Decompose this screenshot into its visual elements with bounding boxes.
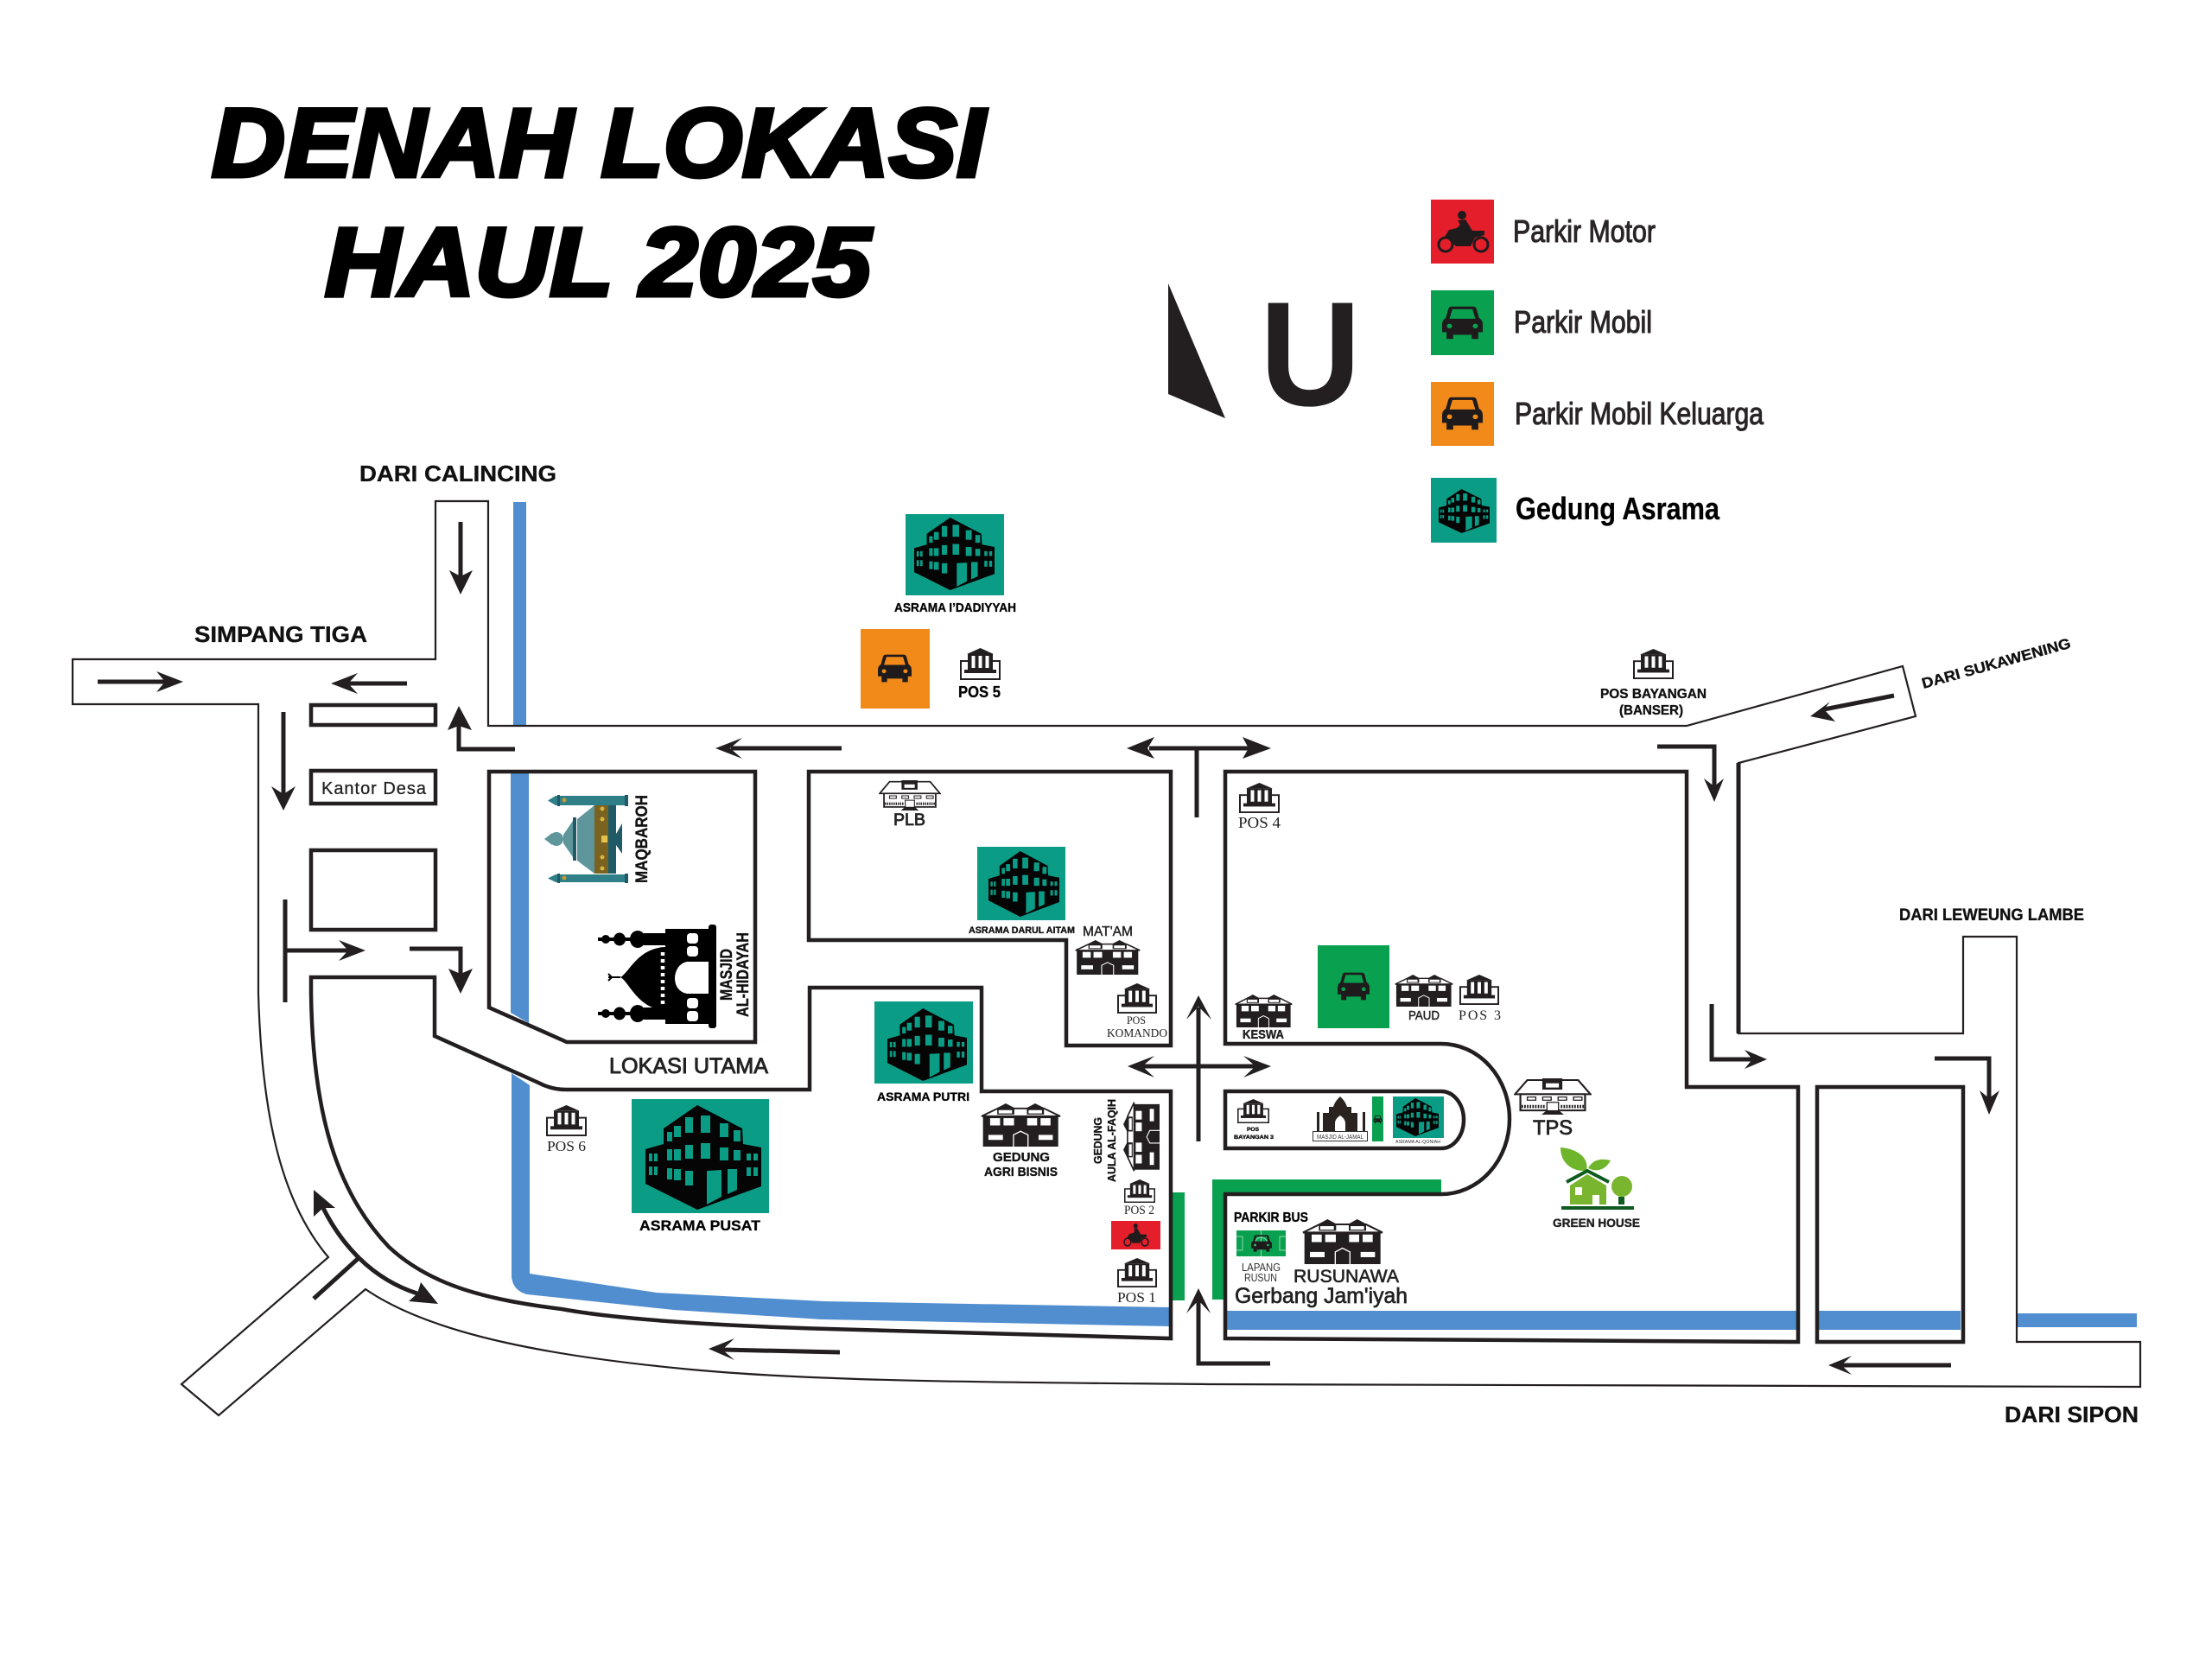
asrama putri xyxy=(874,1001,973,1103)
pos 6: POS 6 xyxy=(547,1138,586,1154)
parkir mobil east xyxy=(1318,945,1389,1028)
icon: masjid al-hidayah xyxy=(598,925,716,1028)
block: small box xyxy=(311,705,435,725)
asrama putri: ASRAMA PUTRI xyxy=(877,1090,969,1103)
label: dari leweung lambe: DARI LEWEUNG LAMBE xyxy=(1899,906,2084,925)
arrow: from calincing xyxy=(449,522,473,594)
arrow: east turn right xyxy=(1712,1004,1767,1069)
title: DENAH LOKASI xyxy=(212,89,988,197)
pos 1: POS 1 xyxy=(1117,1289,1156,1306)
legend: parkir mobil: Parkir Mobil xyxy=(1514,304,1652,340)
pos 4: POS 4 xyxy=(1238,814,1281,831)
arrow: turn down xyxy=(410,949,473,994)
parkir mobil al-jamal xyxy=(1372,1096,1383,1141)
green parking strips xyxy=(1173,1179,1441,1300)
legend: gedung asrama xyxy=(1431,478,1720,543)
rusunawa xyxy=(1294,1219,1399,1287)
north indicator: U xyxy=(1260,271,1361,437)
north indicator xyxy=(1168,271,1361,437)
pos bayangan 3: POS xyxy=(1247,1127,1260,1133)
block: lokasi utama xyxy=(489,772,755,1042)
icon: maqbaroh xyxy=(544,795,628,883)
pos 5: POS 5 xyxy=(958,683,1001,701)
road network xyxy=(73,501,2140,1415)
arrow: cross junction xyxy=(1128,995,1271,1141)
label: dari sipon: DARI SIPON xyxy=(2005,1402,2139,1427)
gedung aula al-faqih: AULA AL-FAQIH xyxy=(1105,1099,1118,1182)
rusunawa: RUSUNAWA xyxy=(1294,1267,1399,1287)
legend: parkir motor xyxy=(1431,200,1656,264)
lapang rusun: RUSUN xyxy=(1244,1271,1277,1284)
paud: PAUD xyxy=(1408,1008,1440,1023)
keswa xyxy=(1236,995,1292,1042)
pos 4 xyxy=(1238,783,1281,831)
block: east campus xyxy=(1225,772,1798,1342)
masjid al-jamal: MASJID AL-JAMAL xyxy=(1317,1135,1363,1141)
label: gerbang jam'iyah: Gerbang Jam'iyah xyxy=(1235,1284,1408,1308)
arrow: gate entrance xyxy=(1186,1288,1270,1363)
title xyxy=(212,89,988,316)
asrama pusat: ASRAMA PUSAT xyxy=(639,1217,761,1234)
label: maqbaroh: MAQBAROH xyxy=(633,795,652,883)
arrow: east turn down xyxy=(1657,747,1724,802)
pos bayangan 3 xyxy=(1234,1099,1274,1141)
paud xyxy=(1395,975,1452,1023)
icon: green house xyxy=(1560,1147,1634,1208)
pos bayangan banser xyxy=(1600,649,1707,718)
label: dari calincing: DARI CALINCING xyxy=(359,461,556,486)
legend: gedung asrama: Gedung Asrama xyxy=(1516,491,1720,526)
block: kantor desa: Kantor Desa xyxy=(321,779,427,798)
label: simpang tiga: SIMPANG TIGA xyxy=(194,621,367,647)
pos bayangan banser: (BANSER) xyxy=(1619,703,1683,718)
arrow: turn up xyxy=(448,706,515,749)
label: masjid al-hidayah: AL-HIDAYAH xyxy=(734,932,753,1017)
label: masjid al-hidayah xyxy=(718,932,753,1017)
legend: parkir mobil keluarga xyxy=(1431,382,1764,446)
arrow: top road left xyxy=(715,738,842,759)
arrow: double top centre xyxy=(1127,737,1271,817)
arrow: from sipon xyxy=(1828,1356,1951,1375)
arrow: south road left xyxy=(709,1338,840,1360)
gedung aula al-faqih: GEDUNG xyxy=(1091,1117,1104,1164)
block: east small xyxy=(1817,1087,1963,1342)
legend: parkir mobil keluarga: Parkir Mobil Keluarga xyxy=(1515,396,1764,431)
label: green house: GREEN HOUSE xyxy=(1553,1217,1640,1230)
asrama darul aitam: ASRAMA DARUL AITAM xyxy=(969,925,1075,936)
asrama i'dadiyyah xyxy=(894,514,1016,615)
asrama darul aitam xyxy=(969,847,1075,936)
pos 5 xyxy=(958,648,1001,701)
pos 3 xyxy=(1459,975,1501,1023)
road outer outline xyxy=(73,501,2140,1415)
pos komando: KOMANDO xyxy=(1107,1027,1167,1039)
arrow: simpang left xyxy=(331,673,407,694)
block: inner pill xyxy=(1225,1091,1464,1148)
pos bayangan 3: BAYANGAN 3 xyxy=(1234,1135,1274,1141)
arrow: t-junction right xyxy=(285,899,365,1002)
pos 1 xyxy=(1117,1258,1156,1306)
legend: parkir motor: Parkir Motor xyxy=(1513,213,1656,249)
asrama pusat xyxy=(632,1099,769,1234)
pos 2 xyxy=(1124,1179,1154,1217)
mat'am xyxy=(1076,925,1140,975)
pos komando xyxy=(1107,983,1167,1039)
pos 2: POS 2 xyxy=(1124,1204,1154,1217)
parkir motor xyxy=(1111,1221,1160,1249)
arrow: simpang right xyxy=(98,671,183,692)
label: dari sukawening: DARI SUKAWENING xyxy=(1920,635,2073,692)
arrow: from sukawening xyxy=(1810,696,1894,721)
pos 3: POS 3 xyxy=(1459,1008,1501,1023)
asrama i'dadiyyah: ASRAMA I’DADIYYAH xyxy=(894,601,1016,615)
parkir mobil keluarga xyxy=(861,629,930,709)
arrow: leweung lambe down xyxy=(1935,1058,1999,1115)
plb xyxy=(880,780,940,830)
block: kantor desa xyxy=(311,771,435,804)
legend: parkir mobil xyxy=(1431,290,1652,355)
tps: TPS xyxy=(1533,1116,1573,1140)
title: HAUL 2025 xyxy=(325,208,873,316)
label: parkir bus: PARKIR BUS xyxy=(1234,1211,1308,1225)
river channels xyxy=(511,502,2137,1330)
block: PLB xyxy=(809,772,1171,1046)
gedung agri bisnis: AGRI BISNIS xyxy=(984,1165,1058,1179)
asrama al-qoniah: ASRAMA AL-QONIAH xyxy=(1395,1140,1440,1145)
arrow: curved junction xyxy=(314,1190,438,1304)
plb: PLB xyxy=(893,811,925,830)
lapang rusun: LAPANG xyxy=(1242,1261,1281,1274)
gedung agri bisnis: GEDUNG xyxy=(993,1150,1050,1165)
pos bayangan banser: POS BAYANGAN xyxy=(1600,687,1707,702)
tps xyxy=(1515,1078,1591,1140)
keswa: KESWA xyxy=(1243,1027,1284,1042)
masjid al-jamal xyxy=(1313,1096,1367,1141)
mat'am: MAT'AM xyxy=(1083,925,1133,939)
gedung agri bisnis xyxy=(982,1103,1060,1179)
pos komando: POS xyxy=(1127,1014,1146,1027)
legend xyxy=(1431,200,1764,543)
arrow: west road down xyxy=(271,712,296,810)
label: masjid al-hidayah: MASJID xyxy=(718,949,736,1001)
block: square xyxy=(311,850,435,930)
label: lokasi utama: LOKASI UTAMA xyxy=(609,1054,768,1078)
block: south perimeter xyxy=(311,977,1171,1338)
asrama al-qoniah xyxy=(1393,1096,1444,1145)
lapang rusun xyxy=(1236,1230,1286,1284)
gedung aula al-faqih xyxy=(1091,1099,1160,1182)
pos 6 xyxy=(547,1105,586,1154)
